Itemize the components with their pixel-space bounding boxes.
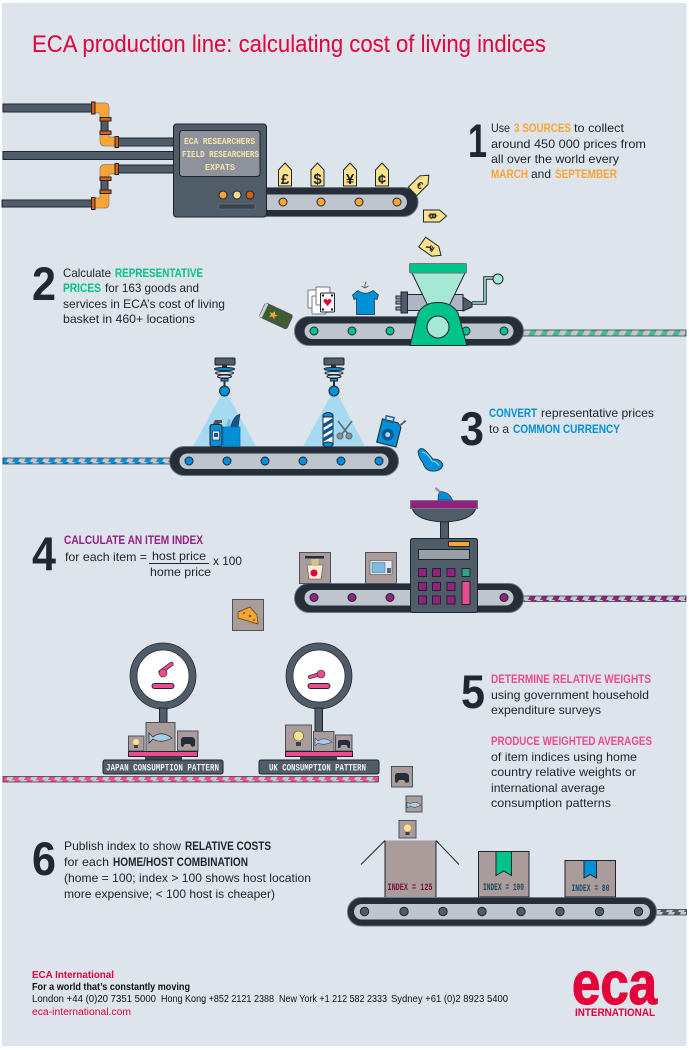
step 1 text: to collect — [574, 121, 625, 135]
step 2 text: PRICES — [63, 283, 101, 295]
step 3 text: to a — [489, 422, 509, 436]
step 4 text and formula: home price — [150, 565, 211, 579]
icon: chicken on scale — [436, 488, 452, 500]
step 1 number: 1 — [468, 114, 487, 167]
step 5 text: international average — [491, 781, 605, 795]
footer contact text: Sydney +61 (0)2 8923 5400 — [391, 994, 508, 1005]
step 2 text: for 163 goods and — [105, 281, 199, 295]
step 3 text — [489, 406, 654, 436]
box: noodles — [300, 552, 330, 584]
step 5 text: country relative weights or — [491, 765, 636, 779]
falling price tags: ₹ — [422, 241, 435, 253]
price tags on conveyor 1: ¢ — [378, 171, 386, 188]
step 2 text: services in ECA’s cost of living — [63, 297, 225, 311]
box: cheese — [232, 600, 264, 630]
footer contact text: For a world that’s constantly moving — [32, 982, 190, 993]
scale: Japan — [103, 643, 223, 774]
falling box: fish — [406, 796, 422, 812]
falling box: light bulb — [399, 820, 416, 838]
step 6 text — [64, 839, 311, 901]
step 1 text: around 450 000 prices from — [491, 137, 646, 151]
falling price tags: € — [415, 180, 425, 193]
ECA logo: INTERNATIONAL — [575, 1007, 655, 1019]
conveyor 3 — [170, 446, 398, 476]
icon: playing cards — [308, 287, 334, 314]
footer contact text: London +44 (0)20 7351 5000 — [32, 994, 156, 1005]
machine: data collection: FIELD RESEARCHERS — [182, 150, 259, 160]
step 6 text: for each — [64, 855, 109, 869]
falling price tags — [408, 171, 446, 260]
step 5 text: of item indices using home — [491, 750, 637, 764]
step 5 text: consumption patterns — [491, 796, 611, 810]
conveyor 2 — [294, 316, 524, 346]
title: ECA production line: calculating cost of living indices — [32, 31, 546, 58]
meat grinder machine — [396, 264, 503, 346]
scale: UK: UK CONSUMPTION PATTERN — [269, 764, 366, 774]
machine: data collection: ECA RESEARCHERS — [184, 137, 256, 147]
footer contact text: Hong Kong +852 2121 2388 — [161, 994, 274, 1005]
step 2 text — [63, 266, 225, 326]
box: index 125 — [361, 840, 459, 897]
step 2 text: Calculate — [63, 266, 111, 280]
scanner 2 — [324, 358, 344, 396]
price tags on conveyor 1: $ — [313, 171, 322, 188]
step 5 number: 5 — [461, 665, 485, 718]
box: index 100 — [478, 852, 529, 897]
scanner light beams — [193, 395, 365, 446]
step 1 text: MARCH — [491, 169, 528, 181]
conveyor 1 — [240, 188, 418, 216]
box: microwave — [366, 552, 396, 584]
icon: barber pole and scissors — [323, 412, 352, 447]
striped pipe: purple — [523, 596, 686, 602]
step 1 text: and — [531, 167, 551, 181]
machine: data collection: EXPATS — [205, 163, 236, 173]
conveyor 4 — [294, 584, 524, 612]
step 1 text: Use — [491, 121, 510, 135]
step 4 number: 4 — [32, 527, 56, 580]
calculator scale machine — [410, 500, 478, 612]
box: index 125: INDEX = 125 — [388, 883, 432, 894]
box: index 100: INDEX = 100 — [483, 883, 524, 894]
striped pipe: pink — [3, 776, 378, 782]
step 4 text and formula: x 100 — [213, 554, 242, 568]
step 3 text: representative prices — [541, 406, 654, 420]
price tags on conveyor 1: £ — [281, 171, 290, 188]
icon: shopping bag and spray bottle — [210, 414, 240, 446]
striped pipe: blue — [3, 458, 170, 464]
icon: t-shirt — [352, 282, 378, 314]
step 6 number: 6 — [32, 832, 56, 885]
step 1 text: 3 SOURCES — [514, 123, 571, 135]
step 6 text: HOME/HOST COMBINATION — [113, 857, 248, 869]
step 2 number: 2 — [32, 257, 56, 310]
step 4 text and formula: for each item = — [65, 550, 147, 564]
step 2 text: REPRESENTATIVE — [115, 268, 203, 280]
step 2 text: basket in 460+ locations — [63, 312, 195, 326]
step 5 text: expenditure surveys — [491, 703, 601, 717]
step 4 text and formula: CALCULATE AN ITEM INDEX — [64, 535, 203, 547]
step 3 text: CONVERT — [489, 408, 537, 420]
step 3 text: COMMON CURRENCY — [513, 424, 620, 436]
box: index 80: INDEX = 80 — [572, 884, 610, 895]
machine: data collection — [174, 124, 266, 217]
step 6 text: (home = 100; index > 100 shows host location — [64, 871, 311, 885]
falling price tags: ฿ — [426, 213, 438, 219]
conveyor 6 — [348, 898, 656, 926]
striped pipe: green — [523, 330, 686, 336]
step 3 number: 3 — [460, 402, 484, 455]
box: index 80 — [565, 860, 616, 897]
footer contact text: ECA International — [32, 970, 114, 981]
step 6 text: more expensive; < 100 host is cheaper) — [64, 887, 275, 901]
scale: UK — [259, 643, 379, 774]
step 1 text: all over the world every — [491, 152, 619, 166]
step 4 text and formula — [64, 535, 242, 579]
footer contact text — [32, 970, 508, 1018]
step 4 text and formula: host price — [152, 549, 206, 563]
step 5 text: PRODUCE WEIGHTED AVERAGES — [491, 736, 652, 748]
price tags on conveyor 1 — [278, 163, 388, 188]
icon: jerry can — [377, 415, 406, 448]
pipes feeding into machine — [2, 102, 174, 210]
step 6 text: Publish index to show — [64, 839, 181, 853]
step 5 text: using government household — [491, 688, 649, 702]
price tags on conveyor 1: ¥ — [346, 171, 355, 188]
footer contact text: New York +1 212 582 2333 — [279, 994, 387, 1005]
step 1 text: SEPTEMBER — [555, 169, 618, 181]
footer contact text: eca-international.com — [32, 1007, 131, 1018]
icon: soda can — [259, 303, 293, 329]
icon: steak — [418, 448, 443, 471]
ECA logo: eca — [572, 950, 658, 1017]
falling box: controller — [392, 766, 412, 787]
scale: Japan: JAPAN CONSUMPTION PATTERN — [106, 764, 219, 774]
step 5 text: DETERMINE RELATIVE WEIGHTS — [491, 674, 651, 686]
step 6 text: RELATIVE COSTS — [185, 841, 271, 853]
step 1 text — [491, 121, 646, 181]
striped pipe: grey — [656, 910, 686, 915]
scanner 1 — [214, 358, 235, 396]
step 5 text — [491, 674, 652, 810]
